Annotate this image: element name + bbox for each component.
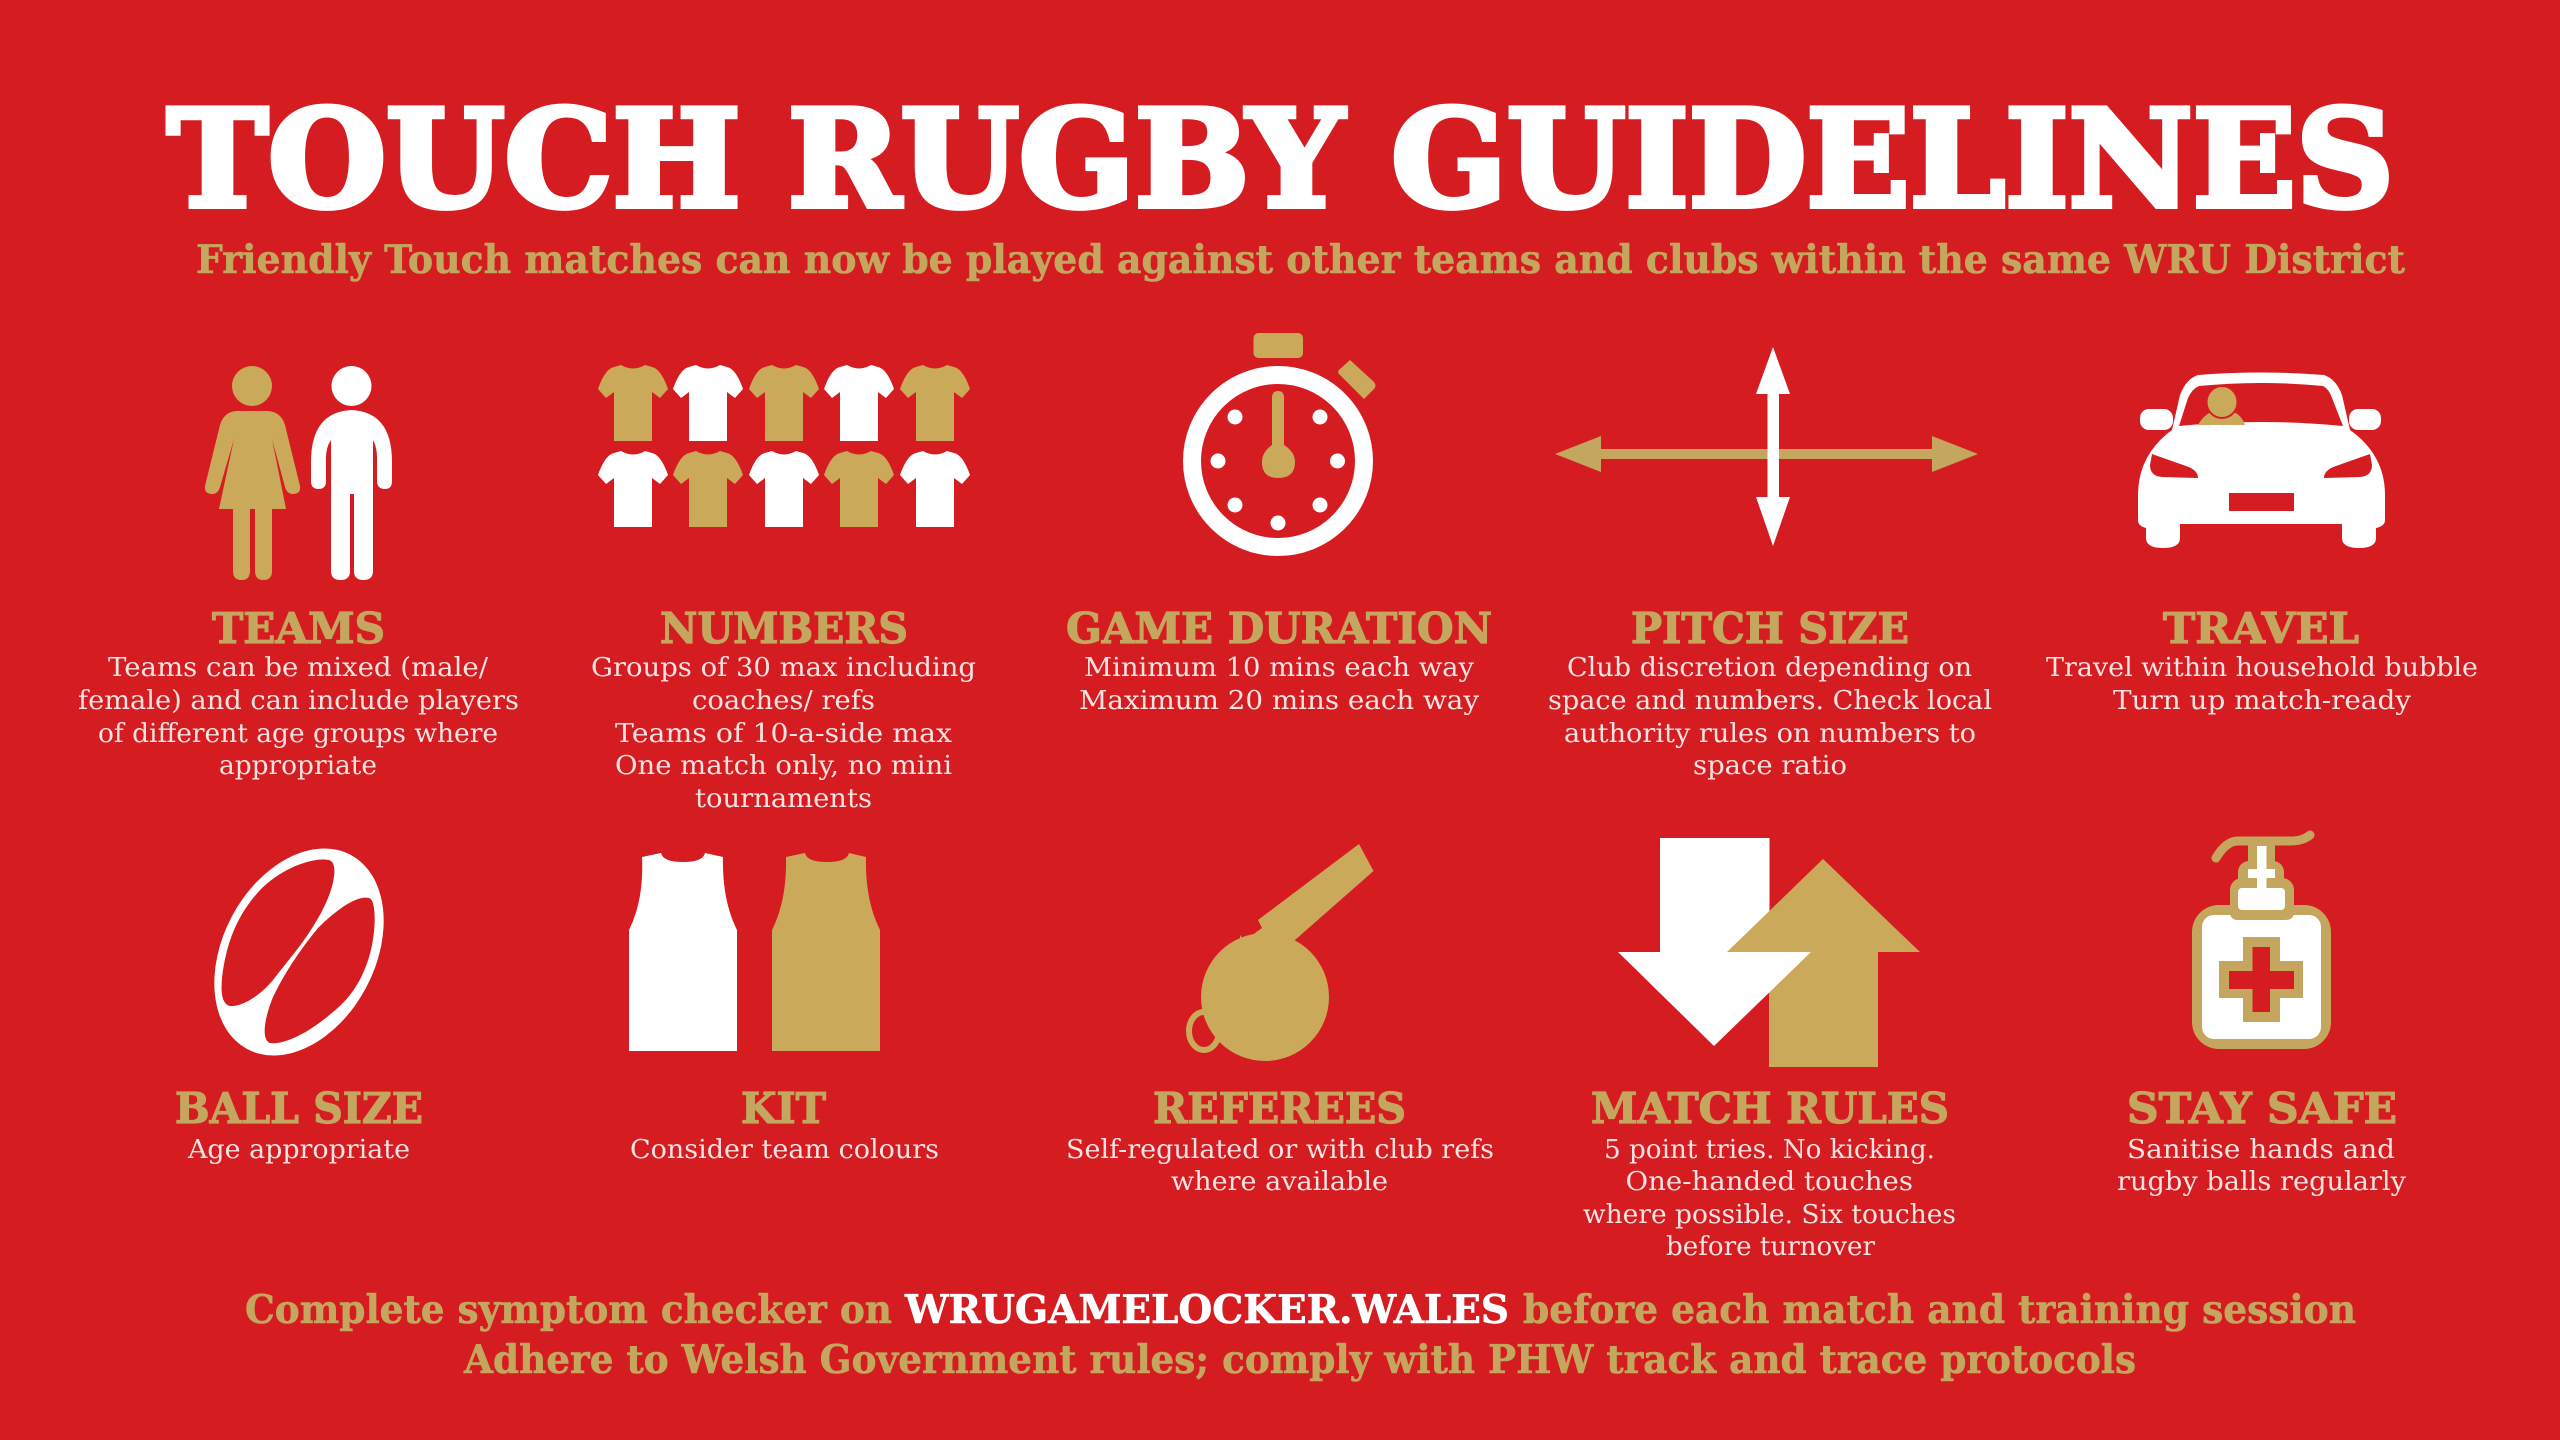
text: numbers: Groups of 30 max including bbox=[591, 653, 976, 683]
text: teams bbox=[78, 653, 519, 781]
heading: teams: TEAMS bbox=[212, 604, 385, 653]
text: travel: Turn up match-ready bbox=[2113, 686, 2411, 716]
text: numbers: Teams of 10-a-side max bbox=[615, 719, 952, 749]
text: stay safe: rugby balls regularly bbox=[2117, 1167, 2406, 1197]
footer line: symptom checker: WRUGAMELOCKER.WALES bbox=[904, 1287, 1509, 1333]
text: teams: Teams can be mixed (male/ bbox=[108, 653, 488, 683]
text: numbers: tournaments bbox=[695, 784, 872, 814]
text: kit: Consider team colours bbox=[630, 1135, 939, 1165]
icon: rugby ball bbox=[180, 819, 418, 1085]
panel: game duration bbox=[1066, 333, 1492, 716]
icon: up and down arrows bbox=[1618, 838, 1920, 1067]
text: travel bbox=[2046, 653, 2478, 716]
icon: car bbox=[2138, 372, 2385, 548]
text: match rules: 5 point tries. No kicking. bbox=[1604, 1135, 1935, 1165]
text: numbers bbox=[591, 653, 976, 814]
panel: numbers bbox=[591, 365, 976, 814]
icon: shirts bbox=[598, 365, 970, 527]
text: match rules: before turnover bbox=[1666, 1232, 1876, 1262]
panel: ball size bbox=[175, 819, 423, 1165]
icon: stopwatch bbox=[1192, 333, 1376, 547]
text: teams: appropriate bbox=[219, 751, 377, 781]
text: numbers: coaches/ refs bbox=[692, 686, 875, 716]
text: travel: Travel within household bubble bbox=[2046, 653, 2478, 683]
panel: kit bbox=[629, 853, 939, 1165]
footer line: government rules: Adhere to Welsh Government rules; comply with PHW track and trace protocols bbox=[463, 1337, 2136, 1383]
text: numbers: One match only, no mini bbox=[615, 751, 952, 781]
text: ball size: Age appropriate bbox=[187, 1135, 410, 1165]
icon: whistle bbox=[1189, 844, 1374, 1061]
heading: numbers: NUMBERS bbox=[660, 604, 908, 653]
icon: pitch arrows bbox=[1555, 347, 1978, 546]
heading: kit: KIT bbox=[741, 1084, 826, 1133]
heading: referees: REFEREES bbox=[1153, 1084, 1406, 1133]
panel: travel bbox=[2046, 372, 2478, 716]
heading: stay safe: STAY SAFE bbox=[2127, 1084, 2397, 1133]
text: match rules: One-handed touches bbox=[1626, 1167, 1913, 1197]
text: pitch size: authority rules on numbers to bbox=[1564, 719, 1976, 749]
text: referees: where available bbox=[1171, 1167, 1388, 1197]
text: pitch size: space and numbers. Check local bbox=[1548, 686, 1992, 716]
text: match rules bbox=[1583, 1135, 1956, 1262]
text: match rules: where possible. Six touches bbox=[1583, 1200, 1956, 1230]
subtitle: Friendly Touch matches can now be played against other teams and clubs within the same WRU District bbox=[196, 237, 2405, 283]
panel: teams bbox=[78, 366, 519, 781]
text: stay safe bbox=[2117, 1135, 2406, 1197]
panel: pitch size bbox=[1548, 347, 1992, 781]
text: stay safe: Sanitise hands and bbox=[2127, 1135, 2395, 1165]
heading: pitch size: PITCH SIZE bbox=[1631, 604, 1909, 653]
panel: stay safe bbox=[2117, 835, 2406, 1197]
text: game duration: Minimum 10 mins each way bbox=[1084, 653, 1474, 683]
heading: match rules: MATCH RULES bbox=[1591, 1084, 1949, 1133]
text: pitch size: Club discretion depending on bbox=[1567, 653, 1972, 683]
text: teams: of different age groups where bbox=[98, 719, 498, 749]
text: game duration: Maximum 20 mins each way bbox=[1079, 686, 1479, 716]
text: referees: Self-regulated or with club refs bbox=[1066, 1135, 1494, 1165]
footer line: symptom checker: before each match and training session bbox=[1523, 1287, 2356, 1333]
text: pitch size: space ratio bbox=[1693, 751, 1847, 781]
footer line: symptom checker: Complete symptom checker on bbox=[245, 1287, 892, 1333]
icon: bibs bbox=[629, 853, 880, 1051]
panel: match rules bbox=[1583, 838, 1956, 1262]
text: teams: female) and can include players bbox=[78, 686, 519, 716]
text: game duration bbox=[1079, 653, 1479, 716]
text: pitch size bbox=[1548, 653, 1992, 781]
footer line: symptom checker bbox=[245, 1287, 2356, 1333]
icon: sanitiser bottle bbox=[2192, 835, 2331, 1049]
heading: game duration: GAME DURATION bbox=[1066, 604, 1492, 653]
panel: referees bbox=[1066, 844, 1494, 1197]
heading: travel: TRAVEL bbox=[2163, 604, 2359, 653]
title: TOUCH RUGBY GUIDELINES bbox=[167, 80, 2394, 238]
icon: woman and man bbox=[205, 366, 392, 580]
heading: ball size: BALL SIZE bbox=[175, 1084, 423, 1133]
text: referees bbox=[1066, 1135, 1494, 1197]
